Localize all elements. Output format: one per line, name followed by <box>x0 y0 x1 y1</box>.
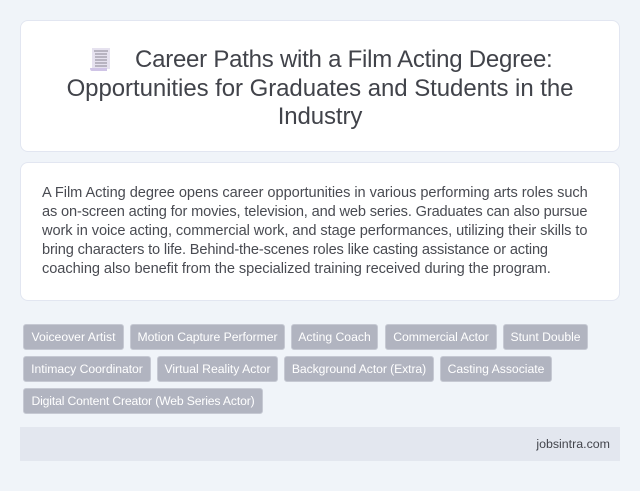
panel: description <box>20 162 620 301</box>
tags <box>23 324 588 414</box>
tag <box>130 324 285 350</box>
tag: Background Actor (Extra) <box>292 362 426 376</box>
tag <box>440 356 552 382</box>
icon: document scroll <box>90 48 110 71</box>
tag: Digital Content Creator (Web Series Actor) <box>31 394 255 408</box>
description text: coaching also benefit from the specialized training received during the program. <box>42 261 551 277</box>
tag: Stunt Double <box>510 330 580 344</box>
tag: Motion Capture Performer <box>138 330 277 344</box>
description text: work in voice acting, commercial work, and stage performances, utilizing their skills to <box>42 223 587 239</box>
tag: Commercial Actor <box>393 330 489 344</box>
tag <box>157 356 278 382</box>
tag <box>23 324 124 350</box>
tag <box>291 324 378 350</box>
tag <box>23 388 263 414</box>
tag <box>23 356 151 382</box>
tag: Casting Associate <box>448 362 544 376</box>
tag: Voiceover Artist <box>32 330 116 344</box>
footer bar <box>20 427 620 461</box>
tag <box>503 324 588 350</box>
title: Industry <box>278 103 362 130</box>
tag <box>284 356 434 382</box>
description text <box>42 185 588 277</box>
title <box>67 46 573 130</box>
footer source: jobsintra.com <box>536 437 610 451</box>
description text: A Film Acting degree opens career opportunities in various performing arts roles such <box>42 185 588 201</box>
description text: bring characters to life. Behind-the-scenes roles like casting assistance or acting <box>42 242 548 258</box>
tag: Acting Coach <box>298 330 371 344</box>
description text: as on-screen acting for movies, television, and web series. Graduates can also pursue <box>42 204 587 220</box>
tag: Intimacy Coordinator <box>31 362 143 376</box>
title: Opportunities for Graduates and Students in the <box>67 75 573 102</box>
tag <box>385 324 497 350</box>
title: Career Paths with a Film Acting Degree: <box>135 46 552 73</box>
tag: Virtual Reality Actor <box>164 362 271 376</box>
panel: title card <box>20 20 620 152</box>
